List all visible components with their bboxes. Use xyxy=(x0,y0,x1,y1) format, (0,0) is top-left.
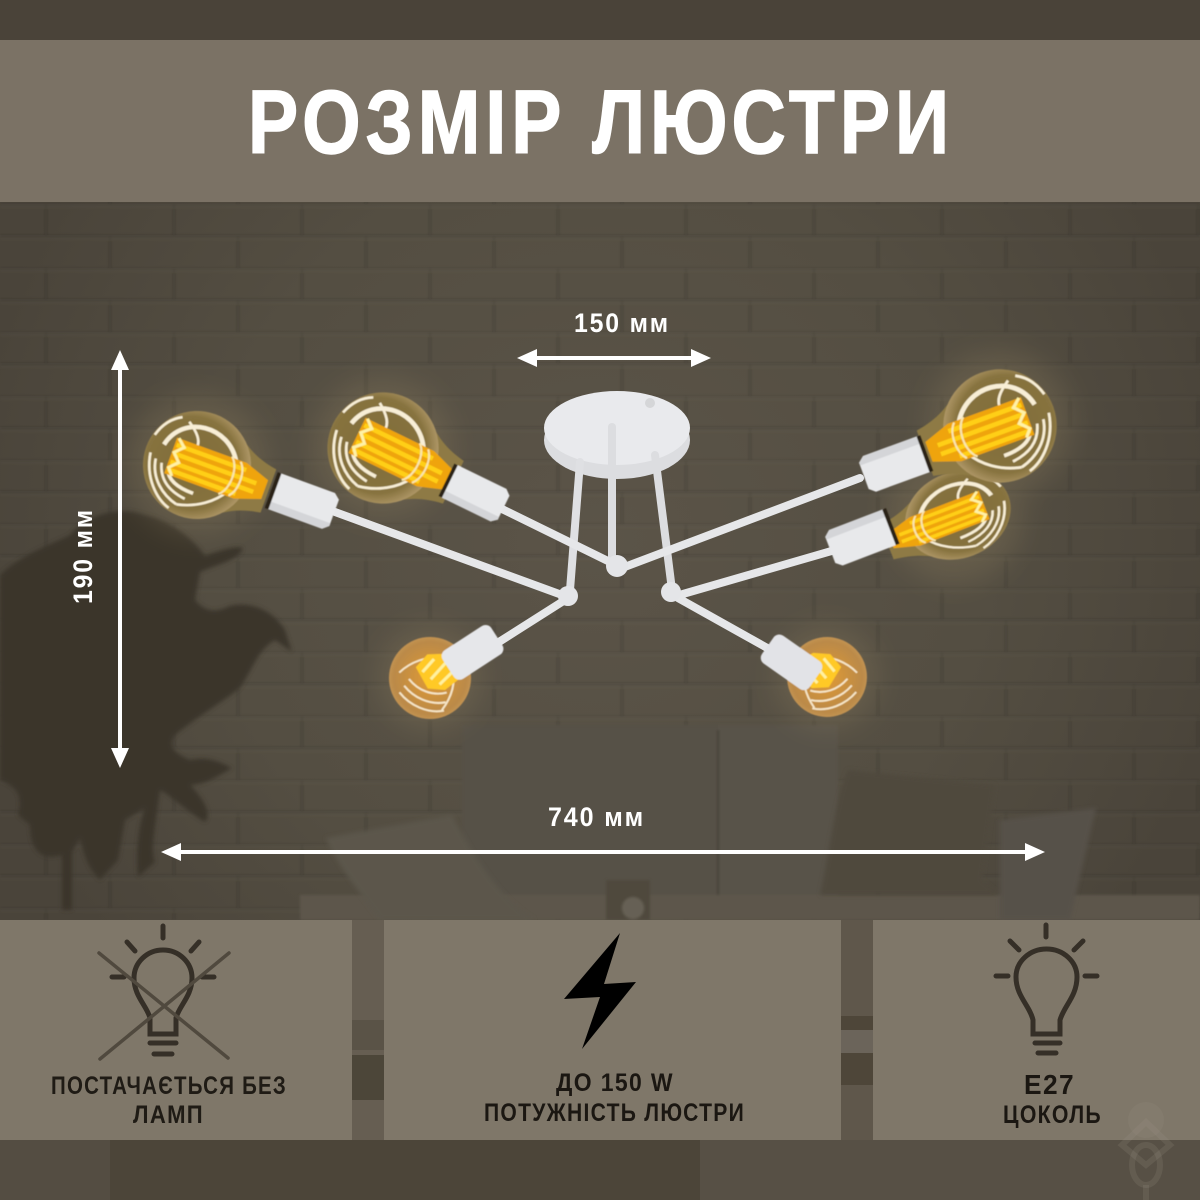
plant silhouette xyxy=(0,511,292,910)
sofa back xyxy=(300,725,1200,920)
icon: lightning xyxy=(564,933,636,1049)
watermark xyxy=(1122,1102,1170,1200)
stems and arms xyxy=(335,427,860,654)
label: ПОСТАЧАЄТЬСЯ БЕЗ xyxy=(51,1072,287,1100)
icon: bulb xyxy=(996,925,1097,1053)
label: ЛАМП xyxy=(133,1101,204,1129)
dimension: 150 mm xyxy=(517,308,711,367)
lower sofa and floor xyxy=(0,920,1200,1200)
dimension: 190 mm: 190 мм xyxy=(68,508,98,604)
dimension: 150 mm: 150 мм xyxy=(574,308,670,338)
title: РОЗМІР ЛЮСТРИ xyxy=(248,73,954,173)
bulb: lower left xyxy=(373,621,506,735)
label: ПОТУЖНІСТЬ ЛЮСТРИ xyxy=(484,1099,745,1127)
chandelier xyxy=(127,351,1073,735)
panel: no bulbs included xyxy=(0,920,352,1140)
vase on sofa xyxy=(606,880,650,920)
light glow xyxy=(127,351,1072,730)
dimension: 740 mm xyxy=(161,802,1045,861)
panel: power xyxy=(384,920,841,1140)
dimension: 190 mm xyxy=(68,350,129,768)
ceiling plate xyxy=(544,391,690,479)
bulb: far left xyxy=(128,396,341,542)
label: ЦОКОЛЬ xyxy=(1003,1101,1102,1129)
label xyxy=(484,1069,745,1127)
joints xyxy=(558,555,681,606)
label xyxy=(51,1072,287,1129)
label: E27 xyxy=(1024,1069,1075,1100)
bulb: lower right xyxy=(758,621,883,733)
pillows xyxy=(326,770,1096,920)
panel: socket type xyxy=(873,920,1200,1140)
bulb: inner left xyxy=(309,374,512,532)
bulb: rear right xyxy=(823,455,1024,583)
dimension: 740 mm: 740 мм xyxy=(548,802,645,832)
label: ДО 150 W xyxy=(556,1069,674,1097)
icon: crossed-out bulb xyxy=(99,926,229,1059)
label xyxy=(1003,1069,1102,1129)
top band behind title xyxy=(0,0,1200,40)
bulb: upper right xyxy=(857,353,1073,507)
title panel xyxy=(0,40,1200,202)
